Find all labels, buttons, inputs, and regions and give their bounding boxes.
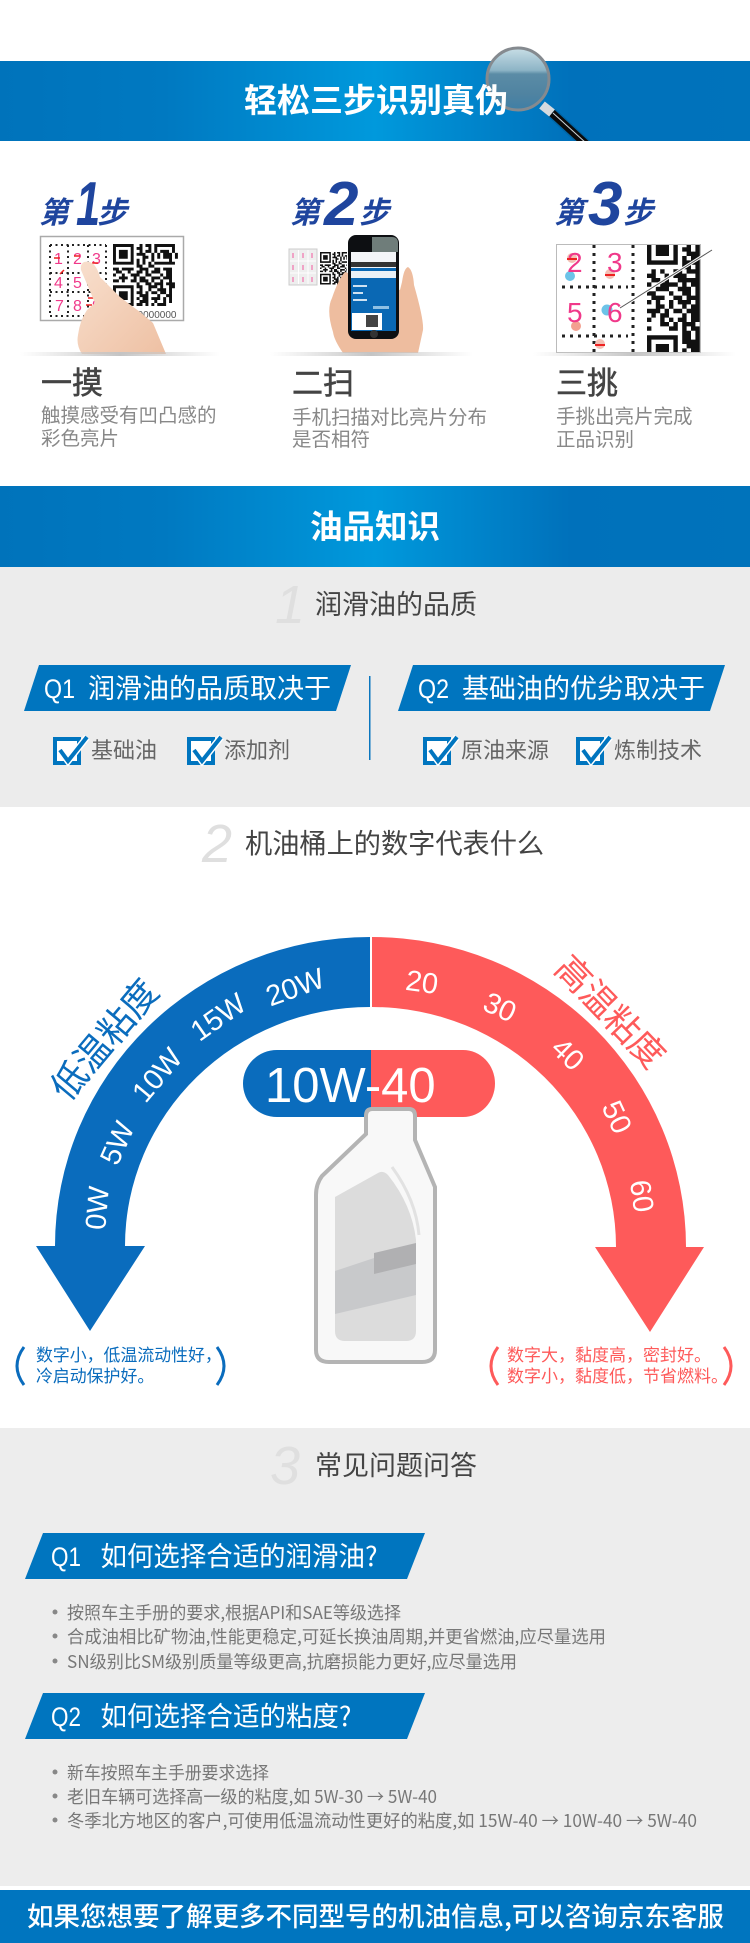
step 3 heading: 3 bbox=[588, 170, 622, 239]
arrow: high temperature viscosity: 50 bbox=[595, 1096, 637, 1139]
FAQ Q1 label: Q1 bbox=[51, 1542, 81, 1572]
FAQ Q1 answers: 合成油相比矿物油,性能更稳定,可延长换油周期,并更省燃油,应尽量选用 bbox=[67, 1624, 606, 1649]
note: high temperature bbox=[491, 1341, 731, 1387]
step 1 title: 一摸 bbox=[41, 358, 103, 403]
step 2 description bbox=[292, 401, 487, 452]
step 1 card with QR code and finger: 00000000 bbox=[132, 310, 177, 321]
step 1 card with QR code and finger: 5 bbox=[73, 275, 82, 292]
step 1 card with QR code and finger: 7 bbox=[55, 298, 64, 315]
step 2 heading: 步 bbox=[359, 188, 392, 232]
pill: 10W-40: 10W-40 bbox=[265, 1059, 436, 1113]
banner: 油品知识 bbox=[0, 486, 750, 567]
enlarged QR image with needle: 6 bbox=[607, 297, 623, 328]
arrow: low temperature viscosity: 10W bbox=[126, 1042, 190, 1109]
step 1 heading bbox=[39, 171, 130, 239]
checkbox: 炼制技术: 炼制技术 bbox=[614, 733, 702, 765]
arrow: high temperature viscosity: 60 bbox=[623, 1178, 659, 1214]
step 3 description bbox=[556, 400, 693, 452]
step 3 heading: 步 bbox=[623, 188, 656, 232]
small QR card bbox=[289, 249, 354, 285]
arrow: high temperature viscosity bbox=[372, 937, 704, 1332]
step 3 bbox=[549, 182, 720, 448]
divider shadow bbox=[533, 352, 736, 356]
banner title: 油品知识 bbox=[310, 501, 440, 548]
arrow: low temperature viscosity bbox=[36, 937, 370, 1331]
FAQ Q2 answers: 冬季北方地区的客户,可使用低温流动性更好的粘度,如 15W-40 → 10W-40 → 5W-40 bbox=[67, 1808, 697, 1833]
label: 高温粘度: 高温粘度 bbox=[545, 942, 679, 1078]
step 2 description: 手机扫描对比亮片分布 bbox=[292, 401, 487, 430]
Q2 label: 基础油的优劣取决于 bbox=[462, 667, 705, 706]
footer text: 如果您想要了解更多不同型号的机油信息,可以咨询京东客服 bbox=[27, 1895, 724, 1934]
arrow: high temperature viscosity: 20 bbox=[404, 965, 440, 1001]
step 2 heading: 2 bbox=[323, 170, 358, 239]
checkbox: 添加剂 bbox=[189, 733, 290, 765]
step 2 description: 是否相符 bbox=[292, 423, 370, 452]
arrow: low temperature viscosity: 0W bbox=[80, 1184, 116, 1231]
Q1 label: 润滑油的品质取决于 bbox=[88, 667, 331, 706]
section heading 1: 1 bbox=[275, 575, 305, 635]
section heading 3: 3 bbox=[270, 1436, 300, 1496]
panel: lubricant quality bbox=[0, 567, 750, 807]
section heading 2: 机油桶上的数字代表什么 bbox=[245, 821, 544, 861]
step 1 card with QR code and finger: 9 bbox=[92, 298, 101, 315]
step 1 description: 彩色亮片 bbox=[41, 422, 119, 451]
step 1 card with QR code and finger: 4 bbox=[54, 275, 63, 292]
step 3 heading: 第 bbox=[554, 188, 589, 232]
step 1 card with QR code and finger bbox=[40, 236, 184, 354]
section heading 2: 2 bbox=[201, 814, 232, 874]
divider shadow bbox=[270, 352, 473, 356]
arrow: high temperature viscosity: 30 bbox=[478, 987, 521, 1029]
footer banner bbox=[0, 1890, 750, 1943]
step 3 title: 三挑 bbox=[556, 358, 618, 403]
FAQ Q2 label: 如何选择合适的粘度? bbox=[100, 1695, 352, 1734]
checkbox: 添加剂: 添加剂 bbox=[224, 733, 290, 765]
arrow: low temperature viscosity: 5W bbox=[94, 1116, 142, 1170]
step 1 description bbox=[41, 399, 217, 451]
chart: viscosity arcs bbox=[17, 937, 731, 1387]
enlarged QR image with needle bbox=[556, 236, 712, 355]
step 2 bbox=[286, 182, 486, 448]
icon: oil bottle bbox=[316, 1109, 435, 1362]
pill: 10W-40 bbox=[243, 1050, 495, 1117]
FAQ Q2 answers bbox=[52, 1760, 697, 1833]
checkbox: 原油来源: 原油来源 bbox=[461, 733, 549, 765]
label: 低温粘度: 低温粘度 bbox=[36, 966, 169, 1110]
FAQ Q1 label: 如何选择合适的润滑油? bbox=[100, 1535, 378, 1574]
step 1 heading: 步 bbox=[97, 188, 130, 232]
FAQ Q2 label: Q2 bbox=[51, 1702, 81, 1732]
divider shadow bbox=[20, 352, 220, 356]
FAQ Q1 answers: 按照车主手册的要求,根据API和SAE等级选择 bbox=[67, 1600, 401, 1625]
step 2 heading bbox=[290, 170, 392, 239]
FAQ Q2 label bbox=[25, 1693, 425, 1739]
Q2 label bbox=[398, 665, 725, 711]
enlarged QR image with needle: 2 bbox=[567, 247, 583, 278]
checkbox: 基础油: 基础油 bbox=[91, 733, 157, 765]
step 1 heading: 1 bbox=[76, 171, 100, 239]
arrow: high temperature viscosity: 40 bbox=[545, 1032, 590, 1077]
step 2 title: 二扫 bbox=[292, 358, 354, 403]
note: low temperature: 数字小，低温流动性好， bbox=[36, 1341, 222, 1366]
FAQ Q2 answers: 老旧车辆可选择高一级的粘度,如 5W-30 → 5W-40 bbox=[67, 1784, 437, 1809]
Q1 label: Q1 bbox=[44, 674, 75, 704]
step 1 card with QR code and finger: 2 bbox=[73, 251, 82, 268]
section heading 1: 润滑油的品质 bbox=[315, 583, 477, 622]
step 1 bbox=[20, 171, 220, 451]
note: high temperature: 数字小，黏度低，节省燃料。 bbox=[507, 1362, 728, 1387]
Q1 label bbox=[24, 665, 351, 711]
step 2 heading: 第 bbox=[290, 188, 325, 232]
checkbox: 基础油 bbox=[55, 733, 157, 765]
banner title: 轻松三步识别真伪 bbox=[244, 74, 508, 122]
step 1 description: 触摸感受有凹凸感的 bbox=[41, 399, 217, 428]
section heading 2 bbox=[201, 814, 544, 874]
section heading 1 bbox=[275, 575, 477, 635]
FAQ Q1 answers bbox=[52, 1600, 606, 1674]
FAQ Q2 answers: 新车按照车主手册要求选择 bbox=[67, 1760, 269, 1785]
FAQ Q1 answers: SN级别比SM级别质量等级更高,抗磨损能力更好,应尽量选用 bbox=[67, 1649, 517, 1674]
step 1 card with QR code and finger: 3 bbox=[92, 251, 101, 268]
note: low temperature bbox=[17, 1341, 224, 1387]
icon: hand holding phone bbox=[329, 235, 423, 353]
step 3 description: 正品识别 bbox=[556, 423, 634, 452]
step 1 card with QR code and finger: 1 bbox=[54, 251, 63, 268]
enlarged QR image with needle: 3 bbox=[607, 247, 623, 278]
step 1 card with QR code and finger: 8 bbox=[73, 298, 82, 315]
note: low temperature: 冷启动保护好。 bbox=[36, 1362, 154, 1387]
panel: FAQ bbox=[0, 1428, 750, 1886]
section heading 3 bbox=[270, 1436, 477, 1496]
arrow: low temperature viscosity: 15W bbox=[185, 987, 253, 1048]
note: high temperature: 数字大，黏度高，密封好。 bbox=[507, 1341, 711, 1366]
step 3 description: 手挑出亮片完成 bbox=[556, 400, 693, 429]
banner: 轻松三步识别真伪 bbox=[0, 48, 750, 148]
step 3 heading bbox=[554, 170, 656, 239]
section heading 3: 常见问题问答 bbox=[315, 1444, 477, 1483]
Q2 label: Q2 bbox=[418, 674, 449, 704]
arrow: low temperature viscosity: 20W bbox=[262, 962, 329, 1013]
icon: magnifying glass bbox=[487, 48, 590, 148]
FAQ Q1 label bbox=[25, 1533, 425, 1579]
step 1 heading: 第 bbox=[39, 188, 74, 232]
enlarged QR image with needle: 5 bbox=[567, 297, 583, 328]
